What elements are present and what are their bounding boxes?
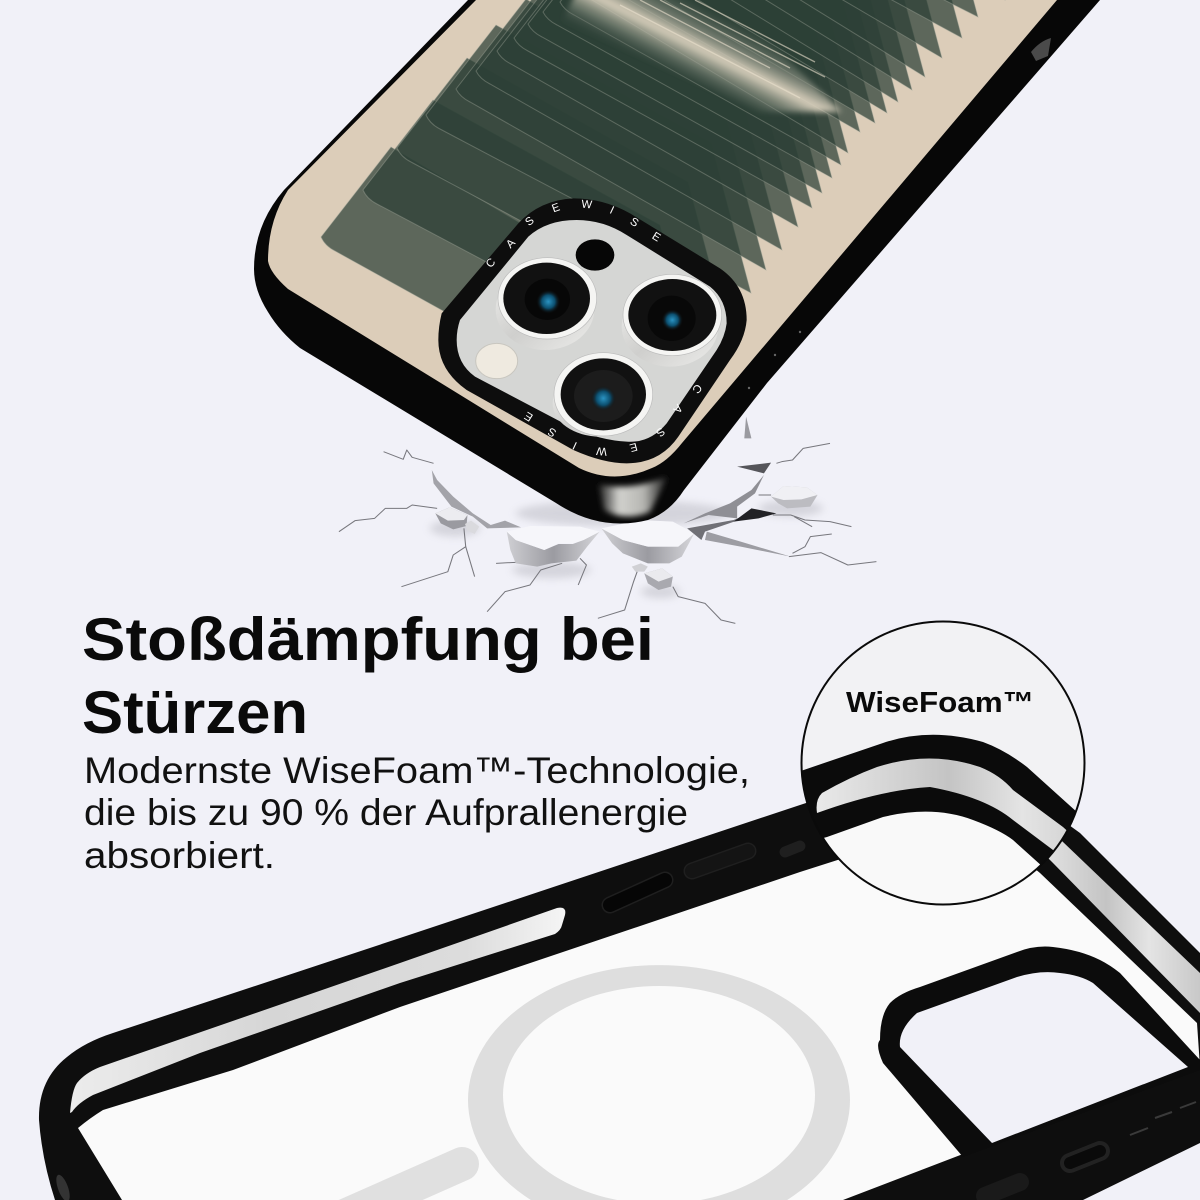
lens 3 [554, 353, 653, 436]
CASEWISE ring text top: E [650, 230, 663, 245]
beige back [268, 0, 1057, 476]
side buttons [610, 846, 800, 905]
right wedge [687, 508, 791, 557]
lens 1 [498, 258, 597, 339]
CASEWISE ring text bottom: C [689, 381, 704, 395]
lens 2 [623, 274, 722, 356]
CASEWISE ring text top: C [484, 256, 498, 270]
CASEWISE ring text bottom: A [670, 402, 684, 415]
title: Stoßdämpfung bei [82, 606, 654, 673]
CASEWISE ring text top: S [628, 216, 641, 230]
CASEWISE ring text top: W [581, 199, 593, 211]
camera cutout rim [878, 947, 1200, 1157]
body text: die bis zu 90 % der Aufprallenergie [84, 792, 688, 833]
side button glint [1031, 38, 1051, 61]
left gap strip [70, 908, 565, 1113]
camera plate [457, 220, 727, 442]
flash [476, 343, 518, 379]
magnified case detail [802, 734, 1076, 869]
stripe sheen [562, 0, 842, 112]
WiseFoam magnifier circle [800, 620, 1086, 906]
green stacked stripes [320, 0, 1006, 312]
CASEWISE ring text bottom [522, 381, 704, 457]
centre right chunk [601, 520, 694, 563]
lower case [39, 767, 1200, 1200]
phone bumper [254, 0, 1100, 524]
circle outline [802, 622, 1084, 904]
crack lines [339, 443, 876, 623]
MagSafe pill [340, 1164, 462, 1200]
bottom ports [54, 1151, 1100, 1200]
left slab edge [432, 470, 521, 528]
body text: absorbiert. [84, 835, 275, 876]
side marks [748, 331, 801, 389]
bumper highlight [598, 476, 668, 517]
lens housings [496, 269, 718, 437]
centre left chunk [507, 526, 600, 567]
CASEWISE ring text bottom: I [571, 439, 579, 451]
WiseFoam label: WiseFoam™ [846, 687, 1034, 719]
camera cutout window [900, 972, 1188, 1143]
MagSafe ring [468, 965, 850, 1200]
CASEWISE ring text top: A [504, 237, 518, 251]
camera surround [438, 198, 747, 463]
CASEWISE ring text bottom: E [628, 440, 639, 454]
soft shadows [430, 500, 823, 598]
bottom rubble [632, 563, 673, 590]
carbon pattern [1130, 1102, 1196, 1135]
right gap strip [1030, 820, 1200, 1013]
clear back interior [78, 840, 1200, 1200]
title [82, 606, 654, 746]
CASEWISE ring text bottom: W [596, 444, 608, 457]
microphone hole [576, 239, 614, 271]
CASEWISE ring text top: I [608, 205, 616, 217]
body text: Modernste WiseFoam™-Technologie, [84, 750, 750, 791]
right upper slab edge [684, 417, 771, 523]
CASEWISE ring text top [484, 199, 663, 270]
small left chunk [435, 507, 479, 534]
top phone [254, 0, 1100, 524]
camera module [438, 198, 747, 463]
CASEWISE ring text bottom: S [546, 424, 559, 439]
CASEWISE ring text top: S [523, 214, 537, 229]
outer rim [39, 767, 1200, 1200]
cracked ground [339, 417, 876, 623]
CASEWISE ring text top: E [550, 201, 562, 215]
small right chunk [771, 486, 817, 508]
CASEWISE ring text bottom: E [522, 409, 535, 423]
CASEWISE ring text bottom: S [653, 425, 667, 439]
body text [84, 750, 750, 876]
title: Stürzen [82, 679, 308, 746]
